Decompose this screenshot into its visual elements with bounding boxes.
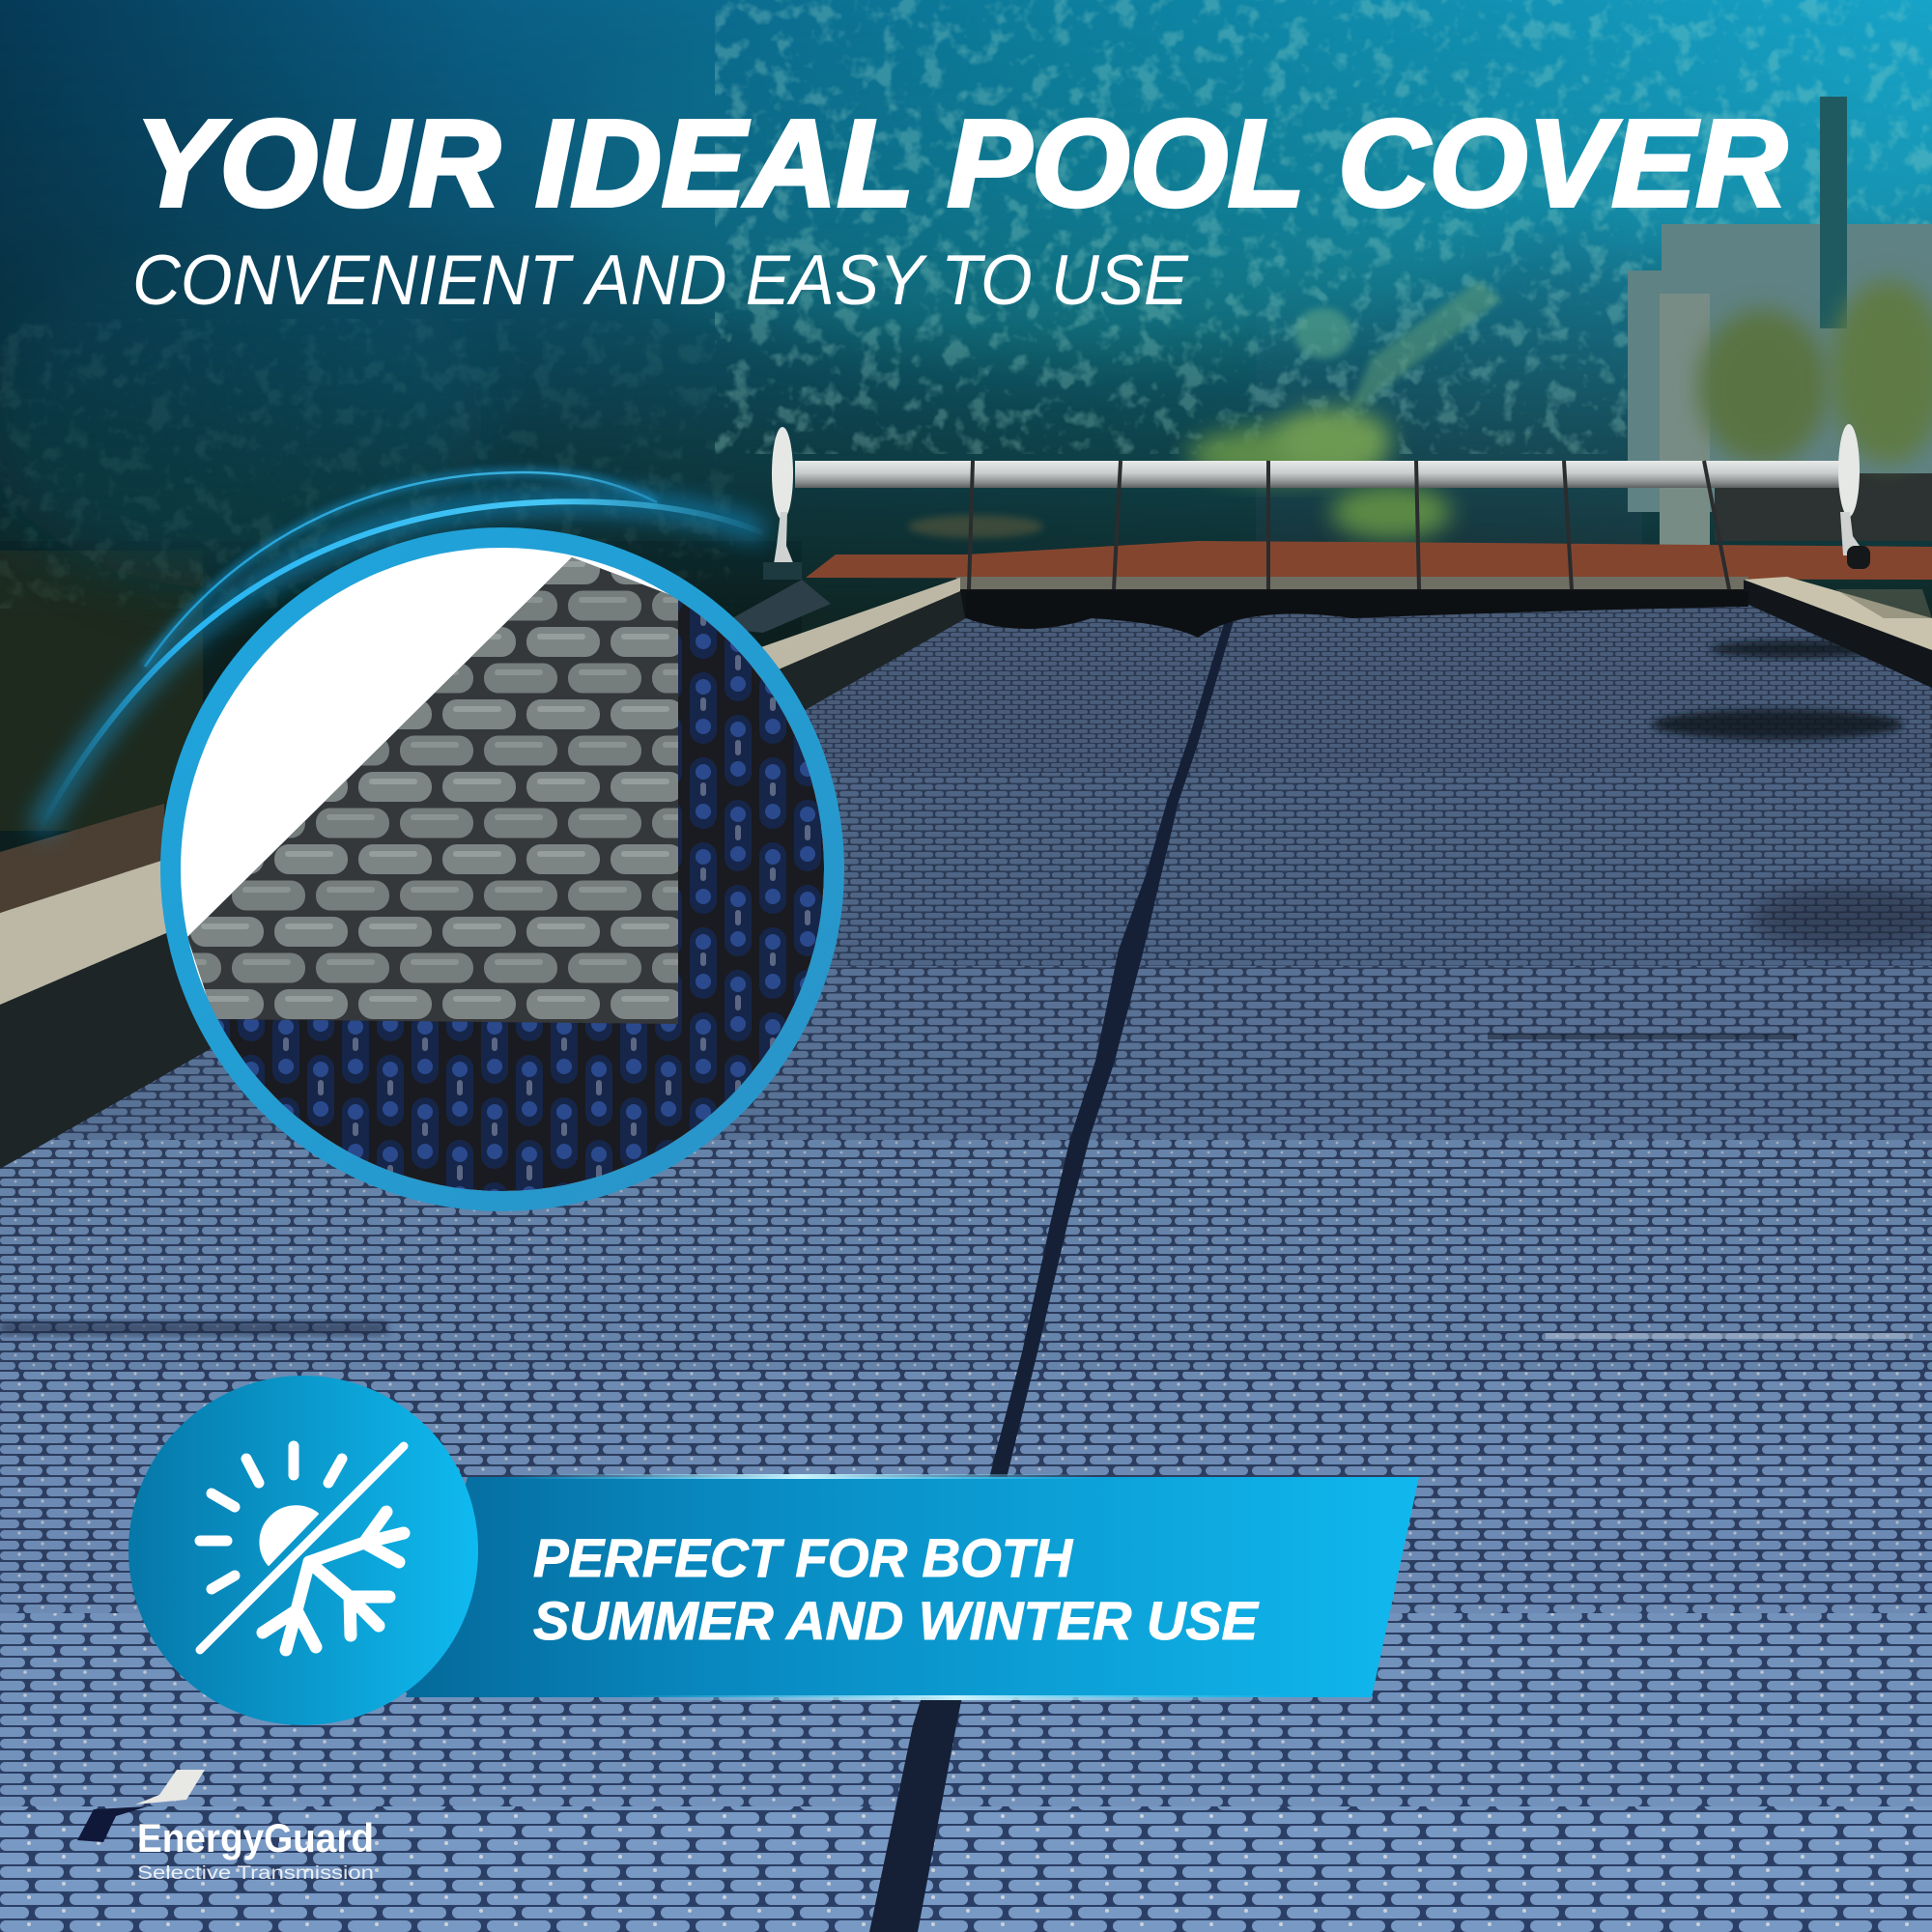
left concrete ledge (0, 578, 966, 1171)
tube (795, 461, 1840, 488)
logo: EnergyGuard: Selective Transmission (137, 1863, 374, 1884)
plants (908, 280, 1932, 539)
garden wall (1628, 97, 1932, 547)
cover shadows (0, 640, 1932, 1339)
left wheel (763, 427, 802, 580)
icon: sun (200, 1446, 342, 1589)
pool cover (0, 599, 1932, 1932)
centre seam (869, 614, 1236, 1932)
banner text: SUMMER AND WINTER USE (533, 1590, 1260, 1651)
banner text (533, 1527, 1260, 1651)
pool back wall (956, 577, 1748, 624)
banner: summer and winter (406, 1474, 1419, 1700)
icon badge: sun and snowflake (128, 1376, 478, 1725)
background: garden scene (0, 0, 1932, 831)
right wheel (1838, 424, 1870, 569)
tarp scallop (966, 591, 1748, 638)
glow arcs behind lens (39, 472, 763, 831)
zoomed lens: bubble cover detail (160, 527, 844, 1211)
logo: EnergyGuard: EnergyGuard (137, 1815, 374, 1861)
icon: diagonal divider (200, 1446, 404, 1650)
icon: snowflake (263, 1512, 404, 1650)
straps (969, 461, 1729, 589)
subtitle: CONVENIENT AND EASY TO USE (132, 242, 1189, 320)
logo: EnergyGuard (77, 1770, 374, 1884)
banner text: PERFECT FOR BOTH (533, 1527, 1074, 1588)
lens white backdrop (174, 541, 831, 1198)
blue underside bubbles (217, 600, 824, 1191)
right concrete ledge (1744, 577, 1932, 688)
deck (806, 541, 1932, 580)
title: YOUR IDEAL POOL COVER (135, 95, 1787, 233)
grey sheet corner (187, 557, 678, 1024)
roller: pool cover reel (763, 424, 1870, 589)
logo mark (77, 1770, 205, 1842)
